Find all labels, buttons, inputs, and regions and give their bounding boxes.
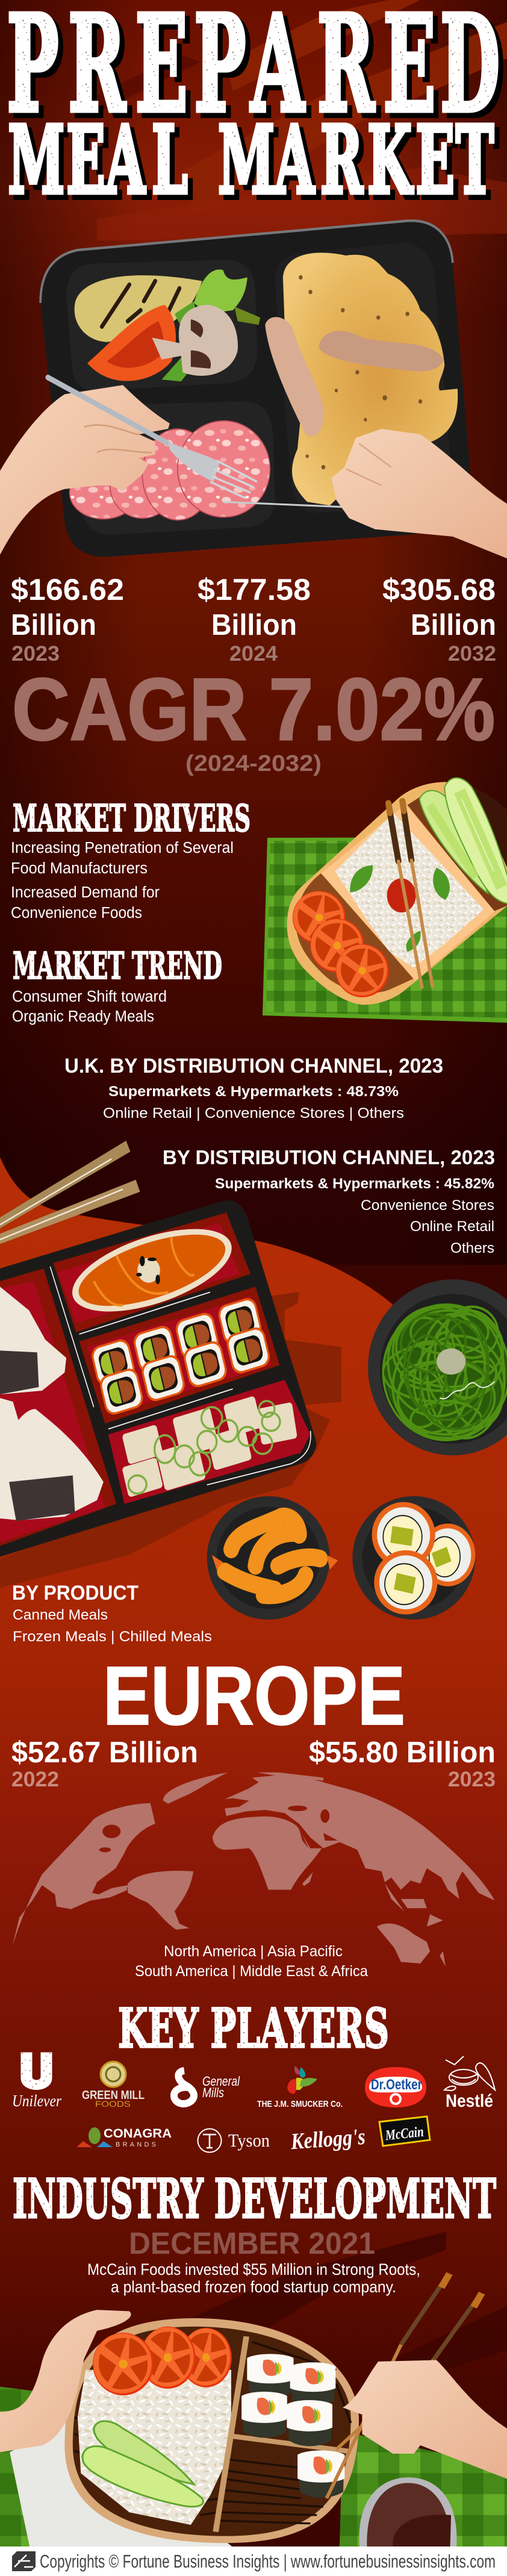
Europe values: $52.67 Billion (11, 1736, 198, 1769)
stat: 2023: Billion (11, 609, 96, 641)
logo: Conagra Brands: BRANDS (116, 2141, 156, 2148)
title (7, 0, 505, 220)
industry development text: a plant-based frozen food startup company. (111, 2278, 396, 2296)
logo: Green Mill Foods: FOODS (95, 2099, 131, 2109)
soy sauce bowl (359, 2477, 457, 2547)
global distribution channel: Online Retail (410, 1218, 494, 1235)
logo: J.M. Smucker (257, 2066, 343, 2109)
logo: Unilever (12, 2053, 61, 2110)
stat: 2032: Billion (411, 609, 496, 641)
illustration: tempura bowl (207, 1496, 338, 1620)
logo: Kellogg's: Kellogg's (290, 2124, 366, 2154)
title: MARKET (218, 106, 494, 215)
heading: market drivers: MARKET DRIVERS (13, 796, 250, 840)
by product: Frozen Meals | Chilled Meals (13, 1629, 212, 1645)
tofu with scallions (122, 1396, 297, 1497)
white napkin (10, 2418, 233, 2547)
by product: Canned Meals (13, 1607, 108, 1623)
other regions: North America | Asia Pacific (164, 1943, 343, 1960)
industry development date: DECEMBER 2021 (129, 2226, 375, 2260)
Europe values (11, 1736, 496, 1791)
heading: market trend: MARKET TREND (13, 944, 222, 988)
region heading: Europe: EUROPE (103, 1650, 405, 1742)
industry development text: McCain Foods invested $55 Million in Strong Roots, (87, 2260, 420, 2278)
CAGR period: (2024-2032) (185, 751, 322, 776)
global distribution channel (163, 1146, 495, 1256)
global distribution channel: Others (450, 1240, 494, 1256)
world map (12, 1773, 495, 1966)
onigiri (0, 1286, 104, 1521)
market drivers list: Increased Demand for (11, 884, 160, 901)
left hand (0, 2310, 131, 2453)
Europe values: $55.80 Billion (309, 1736, 496, 1769)
other regions: South America | Middle East & Africa (135, 1963, 368, 1980)
market drivers list: Increasing Penetration of Several (11, 840, 234, 856)
sushi rolls (90, 1296, 272, 1417)
stat: 2032 (382, 573, 496, 666)
other regions (135, 1943, 368, 1980)
logo: Tyson: Tyson (228, 2130, 270, 2151)
logo: McCain: McCain (384, 2124, 425, 2144)
logo: General Mills: Mills (202, 2085, 224, 2100)
chopsticks (388, 801, 432, 987)
large red table shape (0, 1157, 507, 2576)
Europe values: 2023 (448, 1768, 496, 1791)
stat: 2024: Billion (211, 609, 297, 641)
U.K. distribution channel (64, 1055, 443, 1121)
logo: Conagra Brands (76, 2127, 172, 2148)
brush streaks behind title (81, 0, 507, 241)
illustration: seaweed salad bowl (368, 1279, 507, 1455)
market size stats (11, 573, 496, 666)
logo: General Mills: General (202, 2074, 240, 2089)
illustration: meal tray with hands (0, 220, 507, 558)
market drivers list (11, 840, 234, 922)
stat: 2024: 2024 (229, 642, 278, 666)
baguette (64, 1212, 240, 1328)
illustration: bento box (0, 1200, 316, 1557)
global distribution channel: Supermarkets & Hypermarkets : 45.82% (215, 1176, 494, 1192)
stat: 2023 (11, 573, 124, 666)
stat: 2024 (198, 573, 311, 666)
illustration: sushi bowl (352, 1496, 475, 1620)
stat: 2032: $305.68 (382, 573, 496, 607)
logo: Nestle: Nestlé (446, 2091, 493, 2111)
logo: McCain (379, 2116, 430, 2146)
footer logo (12, 2551, 36, 2571)
green tablecloth (0, 2387, 507, 2547)
title: MEAL (13, 111, 193, 220)
global distribution channel: BY DISTRIBUTION CHANNEL, 2023 (163, 1146, 495, 1168)
market trend text (12, 988, 167, 1025)
illustration: wooden bento with rice (287, 778, 507, 1005)
logo: Dr. Oetker (365, 2067, 426, 2107)
market drivers list: Convenience Foods (11, 905, 142, 922)
logo: Tyson (198, 2128, 270, 2153)
footer bar (0, 2546, 507, 2576)
logo: Unilever: Unilever (12, 2092, 61, 2110)
stat: 2023: $166.62 (11, 573, 124, 607)
logo: Green Mill Foods: GREEN MILL (82, 2089, 145, 2102)
tray shadow (0, 1292, 341, 1588)
basil leaves (350, 865, 450, 952)
logo: Conagra Brands: CONAGRA (104, 2127, 172, 2141)
chopsticks (326, 2274, 482, 2498)
stat: 2032: 2032 (448, 642, 496, 666)
bottom brush streaks (194, 2231, 507, 2378)
stat: 2023: 2023 (11, 642, 60, 666)
page background (0, 0, 507, 1265)
market drivers list: Food Manufacturers (11, 860, 148, 877)
stat: 2024: $177.58 (198, 573, 311, 607)
U.K. distribution channel: Supermarkets & Hypermarkets : 48.73% (108, 1084, 399, 1100)
by product (12, 1582, 212, 1645)
market trend text: Consumer Shift toward (12, 988, 167, 1005)
U.K. distribution channel: U.K. BY DISTRIBUTION CHANNEL, 2023 (64, 1055, 443, 1077)
illustration: table scene (0, 2274, 507, 2547)
logo: Green Mill Foods (82, 2062, 145, 2109)
tomato slices (293, 891, 389, 997)
logo: Dr. Oetker: Dr.Oetker (371, 2077, 422, 2093)
chili (387, 878, 416, 912)
by product: BY PRODUCT (12, 1582, 138, 1605)
cucumbers (420, 778, 507, 903)
title: MEAL (8, 106, 188, 215)
logo: General Mills (174, 2071, 240, 2104)
illustration: green checked cloth (263, 837, 507, 1023)
logo: J.M. Smucker: THE J.M. SMUCKER Co. (257, 2099, 343, 2109)
market trend text: Organic Ready Meals (12, 1008, 154, 1025)
Europe values: 2022 (11, 1768, 59, 1791)
wooden plate (64, 2318, 359, 2543)
U.K. distribution channel: Online Retail | Convenience Stores | Others (103, 1105, 404, 1121)
title: MARKET (223, 111, 499, 220)
logo: Nestle (444, 2056, 495, 2111)
right hand (343, 2360, 507, 2479)
global distribution channel: Convenience Stores (361, 1197, 494, 1214)
illustration: chopsticks (0, 1141, 140, 1244)
industry development text (87, 2260, 420, 2296)
